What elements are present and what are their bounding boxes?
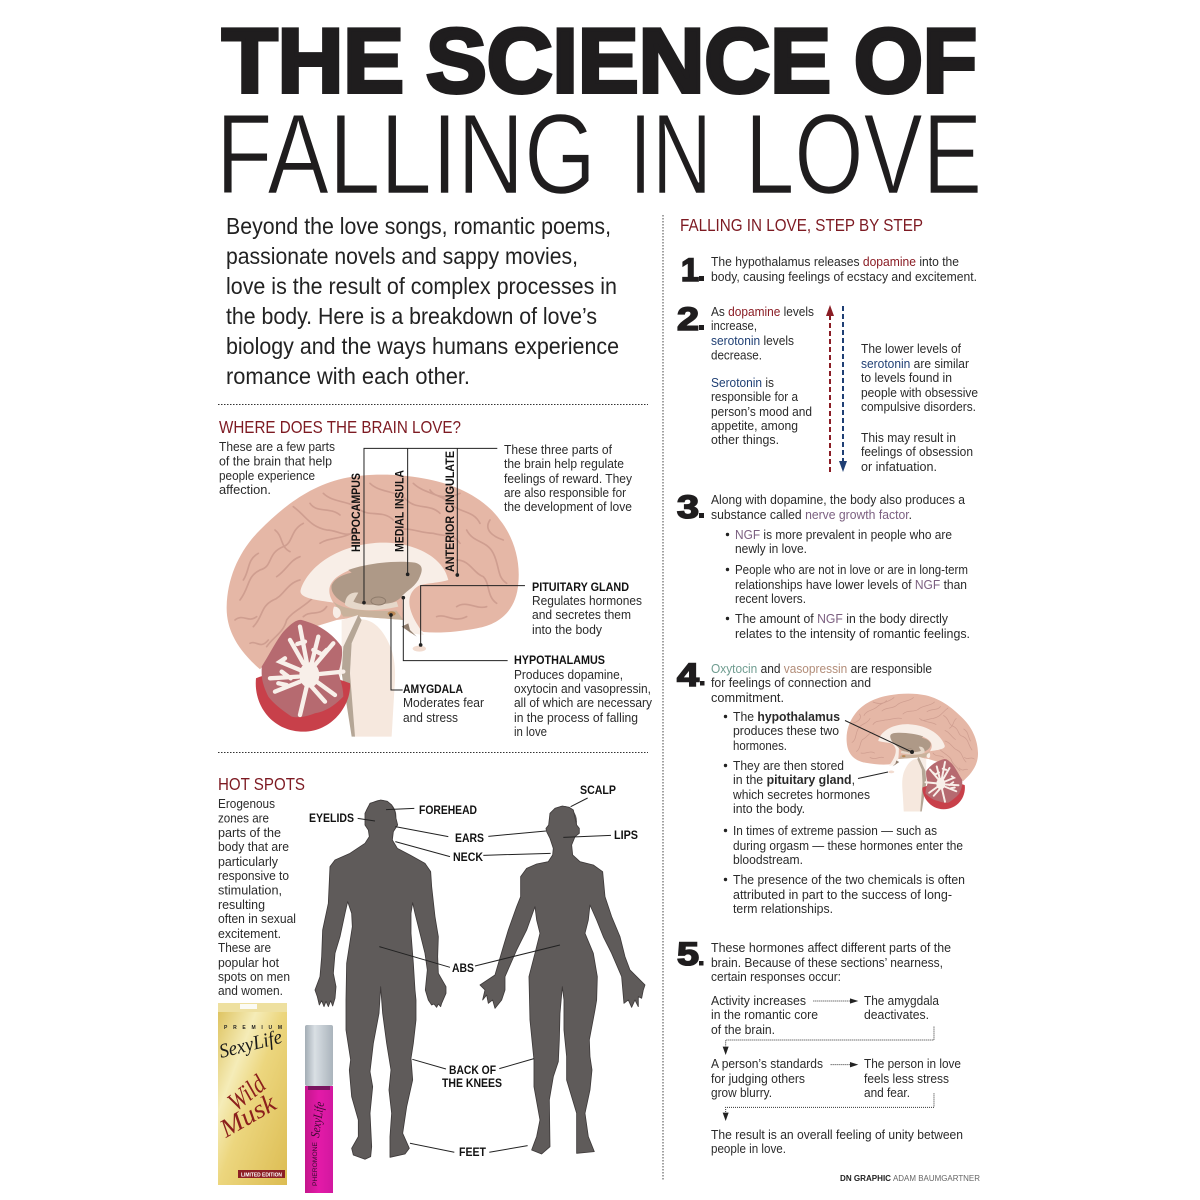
flow arrows: [723, 998, 934, 1121]
step 3: relates to the intensity of romantic feelings.: [735, 627, 970, 641]
small brain illustration: [847, 694, 978, 812]
step 5: A person’s standards: [711, 1057, 823, 1071]
intro text: [226, 213, 619, 389]
step 5: feels less stress: [864, 1072, 949, 1086]
step 2: to levels found in: [861, 371, 952, 385]
leader lines: small brain: [845, 720, 914, 778]
title: OF: [854, 11, 977, 112]
step 2: responsible for a: [711, 390, 798, 404]
text: erogenous zones: Erogenous: [218, 797, 275, 811]
body labels: EYELIDS: [309, 813, 354, 825]
step 2: serotonin are similar: [861, 357, 969, 371]
body labels: LIPS: [614, 830, 638, 842]
label: amygdala: AMYGDALA: [403, 684, 463, 696]
label: amygdala: [403, 684, 484, 725]
text: few parts: These are a few parts: [219, 440, 335, 454]
step 3: People who are not in love or are in long-term: [735, 563, 968, 577]
step 5: grow blurry.: [711, 1086, 772, 1100]
rotated brain labels: ANTERIOR CINGULATE: [445, 451, 457, 572]
step 2: [677, 301, 978, 474]
label: hypothalamus: in love: [514, 725, 547, 739]
rotated brain labels: HIPPOCAMPUS: [351, 473, 363, 552]
rotated brain labels: [351, 451, 457, 572]
step 4: [677, 657, 978, 916]
step 1: [681, 252, 977, 288]
body labels: EARS: [455, 833, 484, 845]
step 5: The amygdala: [864, 994, 939, 1008]
label: pituitary gland: and secretes them: [532, 608, 631, 622]
text: erogenous zones: particularly: [218, 855, 279, 869]
silhouette: man: [315, 800, 446, 1159]
step 1: 1: [681, 252, 699, 288]
title: SCIENCE: [426, 11, 831, 112]
step 4: which secretes hormones: [732, 788, 870, 802]
step 5: people in love.: [711, 1142, 786, 1156]
step 2: feelings of obsession: [861, 445, 973, 459]
text: erogenous zones: excitement.: [218, 927, 281, 941]
title: THE: [222, 11, 404, 112]
text: erogenous zones: body that are: [218, 840, 289, 854]
panel: where does the brain love: [219, 417, 653, 739]
credit: DN GRAPHIC: [840, 1174, 891, 1183]
label: amygdala: and stress: [403, 711, 458, 725]
label: hypothalamus: HYPOTHALAMUS: [514, 655, 605, 667]
step 2: other things.: [711, 433, 779, 447]
step 5: brain. Because of these sections’ nearness,: [711, 956, 943, 970]
body labels: ABS: [452, 963, 474, 975]
step 5: The result is an overall feeling of unity between: [711, 1128, 963, 1142]
step 4: In times of extreme passion — such as: [733, 824, 937, 838]
text: three parts: the development of love: [504, 500, 632, 514]
step 3: recent lovers.: [735, 592, 806, 606]
label: hypothalamus: [514, 655, 653, 739]
text: three parts: are also responsible for: [504, 486, 626, 500]
step 5: The person in love: [864, 1057, 961, 1071]
label: pituitary gland: PITUITARY GLAND: [532, 582, 629, 594]
text: three parts: [504, 443, 633, 514]
step 5: of the brain.: [711, 1023, 775, 1037]
step 3: Along with dopamine, the body also produces a: [711, 493, 965, 507]
step 2: increase,: [711, 319, 757, 333]
step 3: 3: [677, 489, 699, 525]
text: erogenous zones: resulting: [218, 898, 265, 912]
intro text: romance with each other.: [226, 363, 470, 389]
step 4: They are then stored: [733, 759, 844, 773]
heading: hot spots: HOT SPOTS: [218, 774, 305, 794]
title: LOVE: [745, 91, 982, 218]
product: perfume box: Musk: [214, 1088, 281, 1144]
leader lines: [363, 448, 525, 690]
step 5: 5: [677, 936, 699, 972]
step 5: deactivates.: [864, 1008, 929, 1022]
step 4: term relationships.: [733, 902, 833, 916]
step 5: These hormones affect different parts of the: [711, 941, 951, 955]
step 4: The presence of the two chemicals is often: [733, 873, 965, 887]
step 2: people with obsessive: [861, 386, 978, 400]
product: perfume box: [214, 1003, 287, 1185]
body labels: FEET: [459, 1147, 486, 1159]
credit: [840, 1174, 980, 1183]
product: perfume box: LIMITED EDITION: [241, 1172, 282, 1178]
label: amygdala: Moderates fear: [403, 696, 484, 710]
text: few parts: affection.: [219, 483, 271, 497]
title: FALLING: [216, 91, 596, 218]
intro text: passionate novels and sappy movies,: [226, 243, 578, 269]
panel: hot spots: [218, 774, 645, 1159]
body labels: BACK OF: [449, 1065, 496, 1077]
product: perfume box: PREMIUM: [224, 1025, 282, 1031]
step 4: hormones.: [733, 739, 787, 753]
heading: step by step: FALLING IN LOVE, STEP BY STEP: [680, 215, 923, 235]
arrow: dopamine up: [826, 305, 834, 472]
silhouette: woman: [480, 806, 645, 1154]
step 4: produces these two: [733, 724, 839, 738]
intro text: Beyond the love songs, romantic poems,: [226, 213, 611, 239]
text: erogenous zones: popular hot: [218, 956, 279, 970]
text: erogenous zones: spots on men: [218, 970, 290, 984]
step 5: in the romantic core: [711, 1008, 818, 1022]
title: [216, 11, 982, 218]
text: erogenous zones: stimulation,: [218, 884, 282, 898]
text: three parts: the brain help regulate: [504, 457, 624, 471]
product: perfume vial: SexyLife: [307, 1101, 327, 1138]
step 4: for feelings of connection and: [711, 676, 871, 690]
credit: ADAM BAUMGARTNER: [893, 1174, 980, 1183]
body labels: [309, 785, 638, 1159]
product: perfume box: SexyLife: [217, 1026, 284, 1063]
title: IN: [629, 91, 712, 218]
step 1: body, causing feelings of ecstacy and excitement.: [711, 270, 977, 284]
step 2: person’s mood and: [711, 405, 812, 419]
text: erogenous zones: These are: [218, 941, 271, 955]
intro text: biology and the ways humans experience: [226, 333, 619, 359]
text: erogenous zones: responsive to: [218, 869, 289, 883]
text: few parts: people experience: [219, 469, 315, 483]
step 3: [677, 489, 970, 641]
text: erogenous zones: parts of the: [218, 826, 281, 840]
text: erogenous zones: often in sexual: [218, 912, 296, 926]
step 4: into the body.: [733, 802, 805, 816]
heading: where does the brain love: WHERE DOES THE BRAIN LOVE?: [219, 417, 461, 437]
body labels: SCALP: [580, 785, 616, 797]
step 3: The amount of NGF in the body directly: [735, 612, 949, 626]
step 5: for judging others: [711, 1072, 805, 1086]
step 2: appetite, among: [711, 419, 798, 433]
text: three parts: These three parts of: [504, 443, 612, 457]
label: pituitary gland: into the body: [532, 623, 603, 637]
label: hypothalamus: oxytocin and vasopressin,: [514, 682, 651, 696]
body labels: NECK: [453, 852, 484, 864]
step 4: attributed in part to the success of long-: [733, 888, 952, 902]
text: few parts: of the brain that help: [219, 454, 332, 468]
step 4: 4: [677, 657, 699, 693]
step 2: Serotonin is: [711, 376, 774, 390]
step 3: newly in love.: [735, 542, 807, 556]
step 2: or infatuation.: [861, 460, 937, 474]
intro text: the body. Here is a breakdown of love’s: [226, 303, 597, 329]
rotated brain labels: MEDIAL INSULA: [394, 470, 406, 552]
body labels: THE KNEES: [442, 1078, 502, 1090]
step 5: [677, 936, 963, 1156]
step 2: The lower levels of: [861, 342, 961, 356]
step 2: serotonin levels: [711, 334, 794, 348]
step 3: substance called nerve growth factor.: [711, 508, 912, 522]
step 1: The hypothalamus releases dopamine into the: [711, 255, 959, 269]
text: erogenous zones: zones are: [218, 812, 269, 826]
panel: falling in love step by step: [677, 215, 980, 1183]
step 4: The hypothalamus: [733, 710, 840, 724]
step 5: Activity increases: [711, 994, 806, 1008]
intro text: love is the result of complex processes in: [226, 273, 617, 299]
leader lines: body: [358, 798, 611, 1152]
product: perfume vial: PHEROMONE: [313, 1142, 319, 1186]
step 5: and fear.: [864, 1086, 910, 1100]
step 5: certain responses occur:: [711, 970, 841, 984]
step 2: decrease.: [711, 348, 762, 362]
step 4: commitment.: [711, 691, 784, 705]
step 2: This may result in: [861, 431, 956, 445]
arrow: serotonin down: [839, 306, 847, 472]
text: three parts: feelings of reward. They: [504, 472, 633, 486]
label: pituitary gland: Regulates hormones: [532, 594, 642, 608]
body labels: FOREHEAD: [419, 805, 477, 817]
label: pituitary gland: [532, 582, 642, 637]
step 4: Oxytocin and vasopressin are responsible: [711, 662, 932, 676]
label: hypothalamus: all of which are necessary: [514, 696, 653, 710]
step 4: during orgasm — these hormones enter the: [733, 839, 963, 853]
step 4: bloodstream.: [733, 853, 803, 867]
step 2: 2: [677, 301, 699, 337]
label: hypothalamus: in the process of falling: [514, 711, 638, 725]
product: perfume box: Wild: [222, 1069, 272, 1117]
brain illustration: [227, 475, 519, 737]
label: hypothalamus: Produces dopamine,: [514, 668, 623, 682]
text: erogenous zones: [218, 797, 296, 998]
step 3: NGF is more prevalent in people who are: [735, 528, 952, 542]
text: few parts: [219, 440, 335, 497]
text: erogenous zones: and women.: [218, 984, 283, 998]
step 4: in the pituitary gland,: [733, 773, 855, 787]
step 3: relationships have lower levels of NGF than: [735, 578, 967, 592]
step 2: compulsive disorders.: [861, 400, 976, 414]
step 2: As dopamine levels: [711, 305, 814, 319]
product: perfume vial: [305, 1025, 333, 1193]
